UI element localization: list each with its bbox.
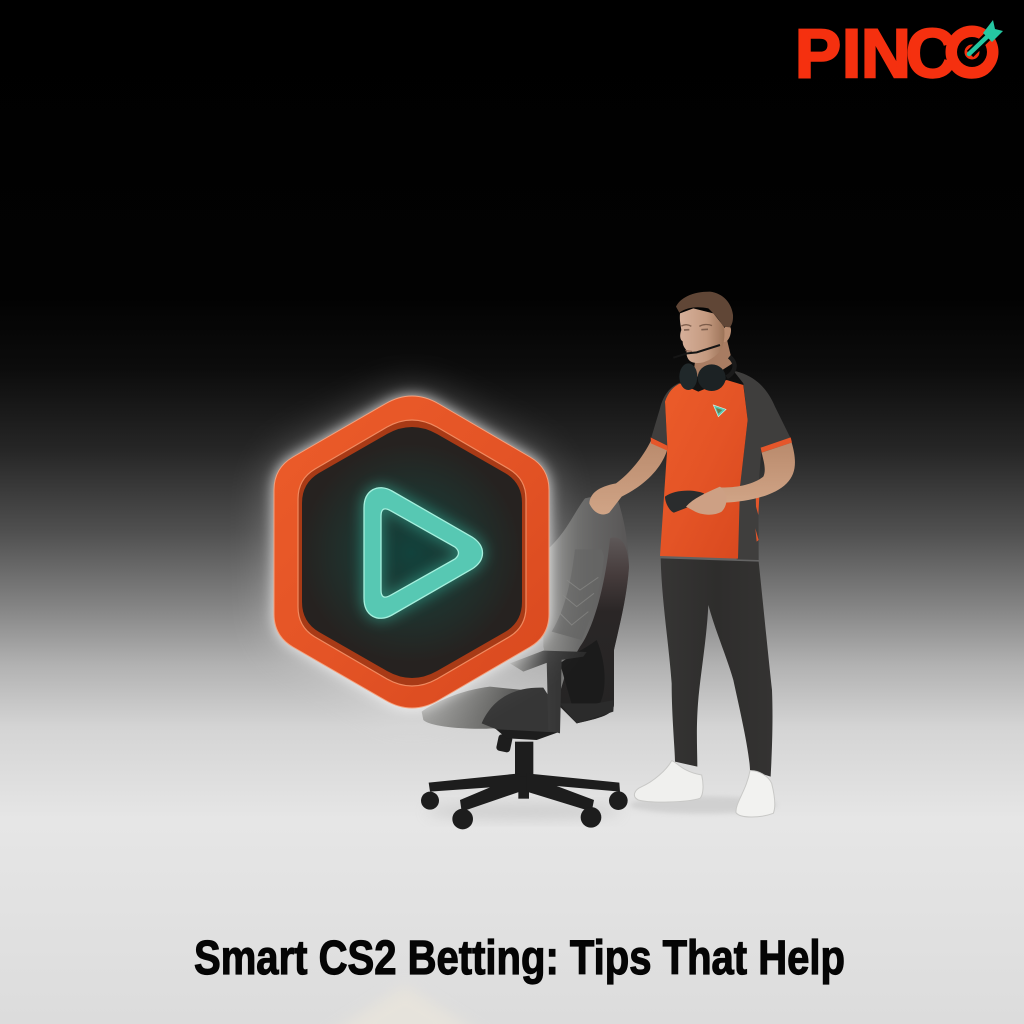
left shoe — [634, 761, 703, 802]
headset microphone — [673, 345, 720, 358]
logo arrow — [969, 20, 1003, 54]
headphones — [679, 357, 735, 391]
chair seat — [422, 687, 560, 732]
chair armrest — [510, 651, 587, 733]
office chair — [421, 497, 629, 829]
title: Smart CS2 Betting: Tips That Help — [194, 932, 845, 985]
ear — [723, 326, 731, 342]
man: legs and shoes — [630, 558, 777, 817]
right shoe — [736, 771, 775, 817]
gripping hand — [686, 487, 726, 515]
chair side bolster — [557, 537, 629, 723]
jersey left sleeve — [651, 383, 680, 446]
hexagon glow — [274, 396, 549, 708]
game controller — [665, 491, 704, 513]
hair — [676, 292, 733, 327]
chair base — [421, 728, 628, 829]
jersey badge — [713, 405, 726, 417]
face — [680, 308, 724, 363]
PINCO logo: PINCO — [795, 15, 999, 92]
chair back — [543, 497, 629, 723]
trousers — [661, 558, 772, 777]
inner recess rim — [298, 420, 526, 686]
orange hexagon frame — [274, 396, 549, 708]
logo target ring — [946, 26, 998, 78]
dark inner panel — [302, 427, 522, 678]
far arm with hand on chair — [589, 439, 667, 514]
man: upper body — [589, 292, 795, 560]
shoe shadow — [630, 796, 777, 814]
face features — [681, 324, 712, 351]
neck — [693, 338, 733, 380]
chair seat cushion — [482, 688, 560, 733]
jersey side panel — [733, 371, 791, 560]
chair back panel with chevrons — [552, 549, 604, 640]
sleeve cuffs — [651, 437, 792, 453]
faint reflection at bottom — [320, 985, 490, 1024]
near arm — [720, 443, 795, 503]
chair lumbar shadow — [560, 640, 605, 711]
jersey orange front — [660, 380, 748, 559]
hexagon badge — [274, 396, 549, 708]
play icon — [364, 488, 482, 618]
